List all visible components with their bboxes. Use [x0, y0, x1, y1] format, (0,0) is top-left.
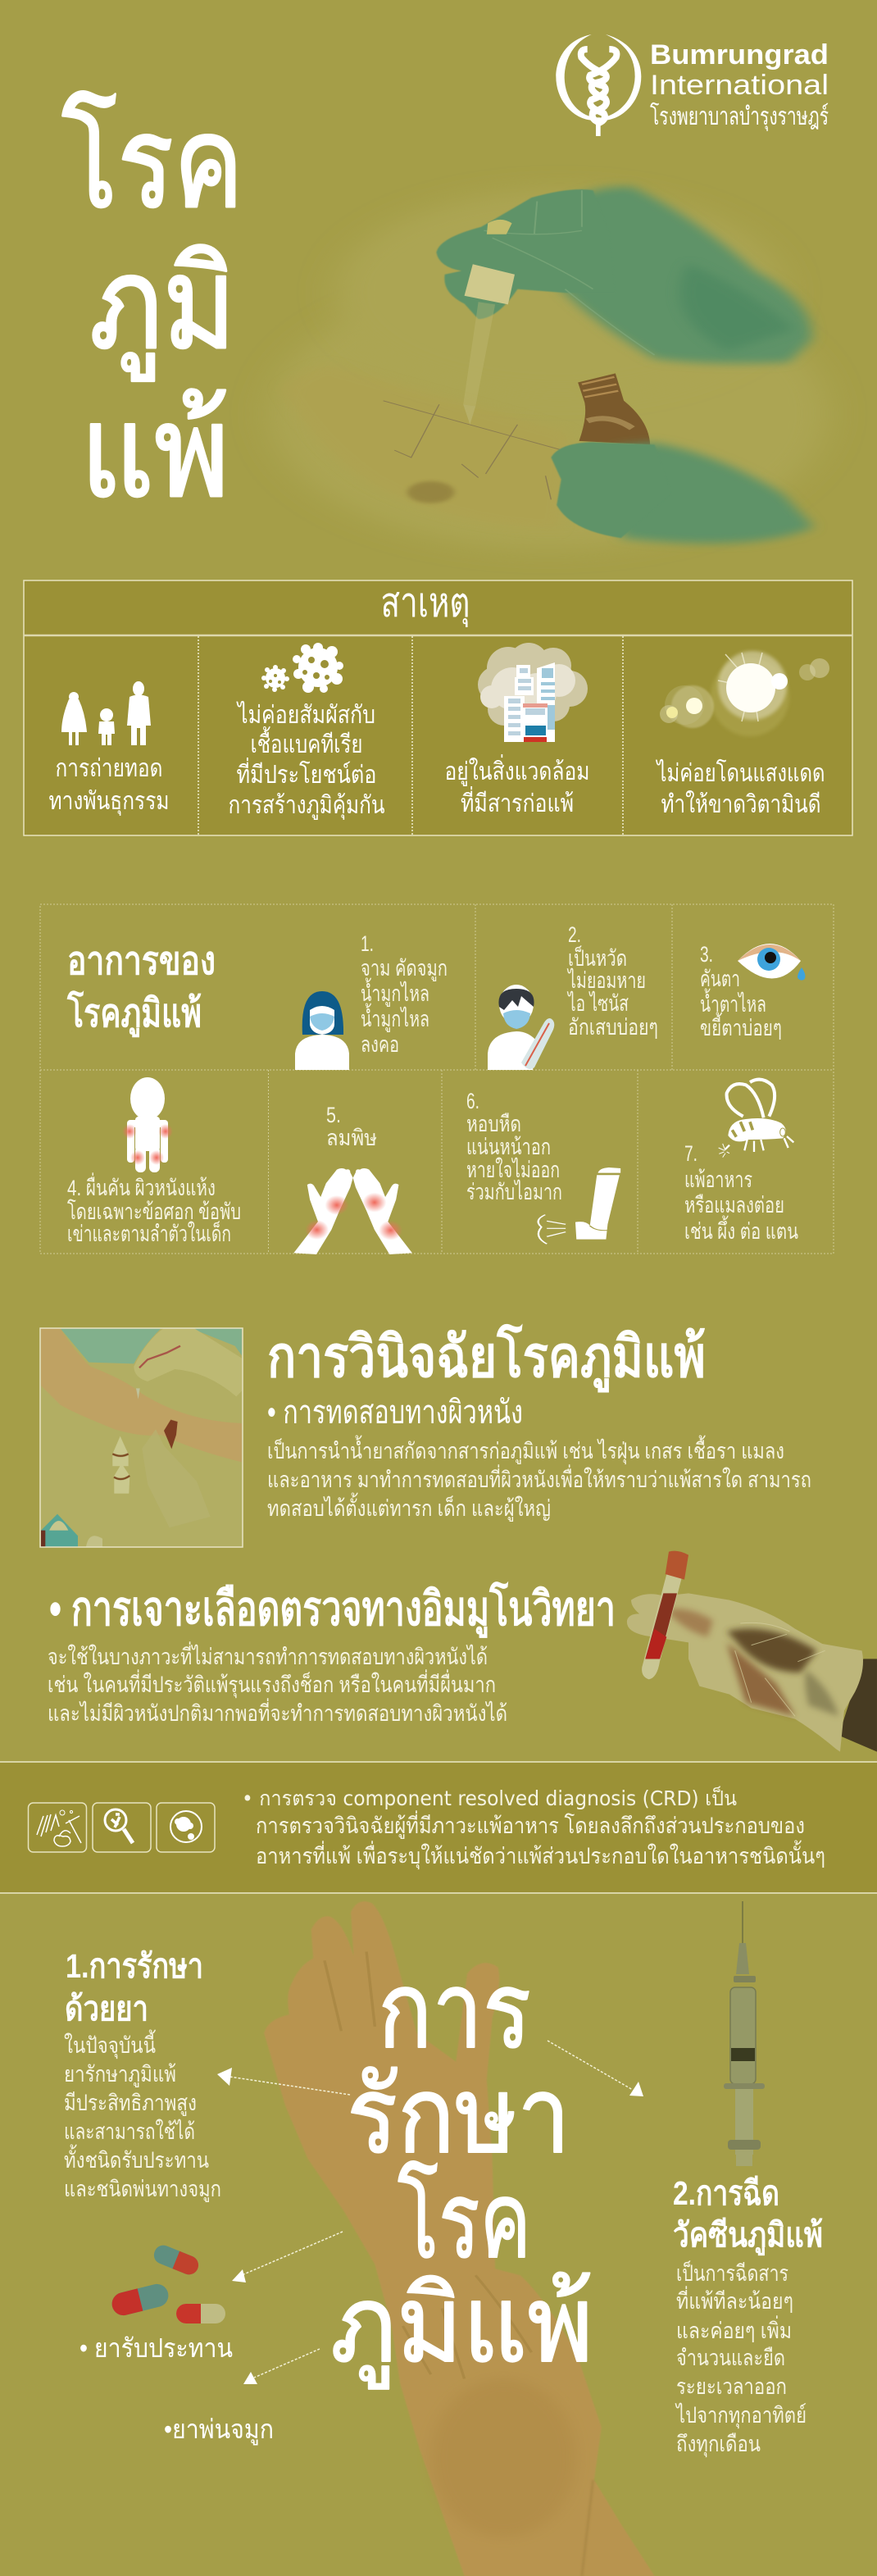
photo: gloved hand holding blood tube — [627, 1551, 877, 1752]
text: blood test: และไม่มีผิวหนังปกติมากพอที่จะทำการทดสอบทางผิวหนังได้ — [48, 1698, 507, 1726]
symptom 3: ขยี้ตาบ่อยๆ — [700, 1012, 782, 1040]
heading: diagnosis: การวินิจฉัยโรคภูมิแพ้ — [267, 1323, 706, 1393]
photo: skin prick test — [40, 1328, 243, 1547]
cause text 4: ไม่ค่อยโดนแสงแดด — [656, 758, 825, 787]
text: nasal spray: •ยาพ่นจมูก — [164, 2414, 274, 2446]
panel: symptoms — [40, 904, 834, 1254]
icon: syringe — [724, 1901, 765, 2166]
cause text 3: ที่มีสารก่อแพ้ — [461, 786, 574, 817]
text: vaccine: ระยะเวลาออก — [676, 2374, 787, 2399]
text: medication: ทั้งชนิดรับประทาน — [64, 2144, 209, 2173]
symptom 2: ไอ ไซนัส — [567, 991, 629, 1016]
logo wordmark: Bumrungrad — [650, 39, 829, 71]
text: vaccine: ถึงทุกเดือน — [676, 2432, 761, 2458]
symptom 2: ไม่ยอมหาย — [567, 968, 646, 993]
text: vaccine: 2.การฉีด — [673, 2174, 779, 2212]
photo: scratching hand — [264, 1901, 655, 2576]
title: โรคภูมิแพ้: แพ้ — [80, 381, 229, 524]
text: blood test: จะใช้ในบางภาวะที่ไม่สามารถทำการทดสอบทางผิวหนังได้ — [48, 1641, 488, 1669]
heading: treatment title: รักษา — [347, 2055, 570, 2175]
panel: CRD band — [0, 1761, 877, 1894]
icon: magnifier — [93, 1803, 151, 1852]
cause text 3: อยู่ในสิ่งแวดล้อม — [444, 754, 590, 786]
icon: washing hands — [28, 1803, 87, 1852]
cause text 2: ที่มีประโยชน์ต่อ — [236, 758, 377, 789]
symptom 7: เช่น ผึ้ง ต่อ แตน — [684, 1215, 798, 1244]
symptom 1: 1. — [361, 931, 374, 956]
symptom 4: 4. ผื่นคัน ผิวหนังแห้ง — [67, 1172, 216, 1200]
cause text 3 — [444, 754, 590, 817]
text: skin test — [267, 1395, 811, 1522]
arrow: to nasal spray — [243, 2349, 320, 2384]
heading: treatment title — [330, 1950, 593, 2389]
symptom 7: 7. — [684, 1141, 698, 1166]
text: CRD: การตรวจวินิจฉัยผู้ที่มีภาวะแพ้อาหาร โดยลงลึกถึงส่วนประกอบของ — [256, 1810, 805, 1839]
text: oral medication: • ยารับประทาน — [80, 2333, 233, 2363]
icon: caduceus crest — [556, 34, 641, 136]
icon: family — [61, 681, 151, 745]
symptom 3 — [700, 942, 805, 1040]
text: medication: ยารักษาภูมิแพ้ — [64, 2062, 176, 2087]
heading: symptoms: โรคภูมิแพ้ — [66, 990, 202, 1038]
cause text 4 — [656, 758, 825, 818]
text: blood test — [48, 1641, 507, 1726]
text: vaccine: เป็นการฉีดสาร — [676, 2259, 788, 2286]
text: vaccine: และค่อยๆ เพิ่ม — [676, 2315, 792, 2343]
panel: causes — [24, 580, 852, 835]
panel: diagnosis — [40, 1323, 877, 1752]
symptom 4: โดยเฉพาะข้อศอก ข้อพับ — [67, 1199, 241, 1224]
symptom 3: 3. — [700, 942, 713, 967]
text: medication: มีประสิทธิภาพสูง — [64, 2091, 197, 2116]
heading: treatment title: การ — [378, 1950, 531, 2070]
cause text 2: เชื้อแบคทีเรีย — [251, 726, 362, 758]
text: vaccine: ไปจากทุกอาทิตย์ — [675, 2402, 807, 2429]
symptom 4 — [67, 1077, 241, 1246]
symptom 1 — [295, 931, 448, 1070]
cause text 1: ทางพันธุกรรม — [49, 788, 169, 817]
cause text 1: การถ่ายทอด — [56, 755, 162, 782]
text: medication: ด้วยยา — [65, 1990, 148, 2028]
text: skin test: ทดสอบได้ตั้งแต่ทารก เด็ก และผู้ใหญ่ — [267, 1492, 551, 1522]
symptom 7: หรือแมลงต่อย — [684, 1193, 784, 1217]
heading: symptoms: อาการของ — [67, 940, 216, 983]
text: medication — [64, 1947, 221, 2202]
heading: treatment title: โรค — [398, 2160, 531, 2280]
symptom 7: แพ้อาหาร — [684, 1167, 752, 1192]
text: vaccine: วัคซีนภูมิแพ้ — [673, 2216, 823, 2256]
cause text 1 — [49, 755, 169, 817]
icon: sun — [660, 651, 829, 736]
photo: allergy skin test with gloved hands — [269, 186, 828, 549]
icon: petri dish — [157, 1803, 215, 1852]
symptom 2: 2. — [568, 922, 581, 947]
heading: blood test: • การเจาะเลือดตรวจทางอิมมูโนวิทยา — [49, 1580, 616, 1638]
heading: symptoms — [66, 940, 216, 1038]
logo: Bumrungrad International — [556, 34, 829, 136]
text: vaccine — [673, 2174, 823, 2458]
heading: causes: สาเหตุ — [380, 580, 470, 627]
cause text 2: ไม่ค่อยสัมผัสกับ — [236, 700, 375, 729]
symptom 5: ลมพิษ — [326, 1126, 377, 1150]
symptom 2 — [488, 922, 658, 1070]
symptom 2: เป็นหวัด — [568, 944, 627, 971]
symptom 2: อักเสบบ่อยๆ — [568, 1015, 658, 1040]
symptom 4: เข่าและตามลำตัวในเด็ก — [67, 1219, 231, 1246]
text: skin test: • การทดสอบทางผิวหนัง — [267, 1395, 523, 1431]
symptom 7 — [684, 1080, 798, 1244]
title: โรคภูมิแพ้ — [61, 91, 243, 524]
symptom 1: น้ำมูกไหล — [361, 1003, 429, 1032]
cause text 4: ทำให้ขาดวิตามินดี — [661, 790, 821, 818]
text: medication: 1.การรักษา — [66, 1947, 203, 1985]
symptom 6: แน่นหน้าอก — [466, 1135, 551, 1159]
symptom 1: น้ำมูกไหล — [361, 977, 429, 1007]
symptom 3: น้ำตาไหล — [700, 988, 766, 1017]
arrow: to medication — [217, 2068, 350, 2095]
symptom 5: 5. — [326, 1103, 341, 1127]
icon: bacteria — [261, 643, 343, 693]
arrow: to pills — [232, 2232, 343, 2282]
text: vaccine: ที่แพ้ทีละน้อยๆ — [676, 2286, 793, 2314]
panel: treatment — [64, 1901, 823, 2576]
text: medication: ในปัจจุบันนี้ — [64, 2029, 156, 2059]
heading: treatment title: ภูมิแพ้ — [330, 2264, 593, 2389]
cause text 2 — [228, 700, 385, 821]
symptom 6: 6. — [466, 1089, 479, 1113]
symptom 6: หอบหืด — [466, 1112, 521, 1136]
symptom 3: คันตา — [700, 967, 740, 991]
text: blood test: เช่น ในคนที่มีประวัติแพ้รุนแรงถึงช็อก หรือในคนที่มีผื่นมาก — [48, 1669, 496, 1699]
icon: pills — [110, 2242, 225, 2323]
title: โรคภูมิแพ้: ภูมิ — [89, 233, 236, 381]
logo: Bumrungrad International: International — [650, 70, 829, 101]
symptom 5 — [293, 1103, 412, 1254]
title: โรคภูมิแพ้: โรค — [61, 91, 243, 234]
arrow: to vaccine — [548, 2041, 643, 2096]
text: CRD — [242, 1786, 825, 1870]
symptom 1: ลงคอ — [361, 1032, 399, 1057]
symptom 6 — [466, 1089, 620, 1244]
text: medication: และชนิดพ่นทางจมูก — [64, 2177, 221, 2202]
text: medication: และสามารถใช้ได้ — [64, 2119, 195, 2144]
cause text 2: การสร้างภูมิคุ้มกัน — [228, 792, 385, 821]
symptom 6: หายใจไม่ออก — [466, 1157, 560, 1182]
text: CRD: • การตรวจ component resolved diagnosis (CRD) เป็น — [242, 1786, 737, 1810]
icon: polluted city — [478, 643, 588, 742]
symptom 1: จาม คัดจมูก — [361, 956, 448, 981]
symptom 6: ร่วมกับไอมาก — [466, 1180, 562, 1204]
text: vaccine: จำนวนและยืด — [676, 2346, 785, 2370]
